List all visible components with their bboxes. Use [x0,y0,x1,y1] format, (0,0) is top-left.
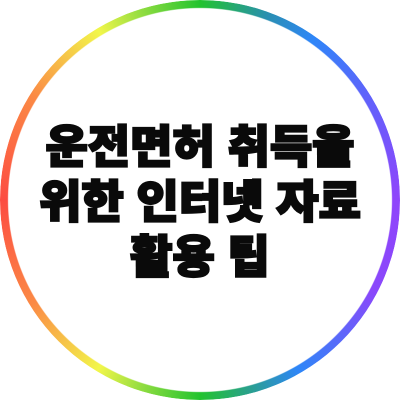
title line 1: 운전면허 취득을 [45,122,355,172]
title line 2: 위한 인터넷 자료 [39,177,361,227]
title line 3: 활용 팁 [130,232,270,282]
